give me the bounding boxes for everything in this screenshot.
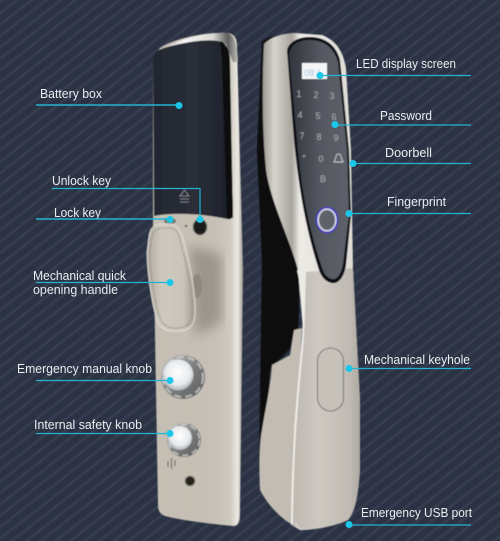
callout: password: Password	[380, 109, 432, 123]
LED display screen: 08:1	[304, 68, 322, 78]
callout: emergency USB port: Emergency USB port	[361, 506, 472, 520]
battery box cover	[153, 40, 233, 219]
callout: fingerprint	[346, 195, 471, 217]
callout: lock key: Lock key	[54, 206, 102, 220]
callout: emergency USB port	[346, 506, 472, 528]
keypad digits: 9	[333, 133, 339, 143]
indicator dot	[185, 225, 187, 227]
emergency manual knob	[161, 355, 205, 399]
keypad digits: 6	[331, 112, 337, 122]
body left edge highlight	[292, 270, 304, 525]
plate: interior metal backplate	[153, 33, 243, 526]
callout: mechanical quick opening handle	[33, 269, 174, 297]
speaker icon	[168, 458, 175, 469]
callout: internal safety knob	[34, 418, 174, 437]
fingerprint sensor	[316, 208, 338, 232]
eject icon	[180, 190, 189, 202]
interior lock unit	[147, 33, 243, 526]
callout: doorbell	[350, 146, 471, 167]
keypad digits: 3	[329, 91, 335, 101]
LED display screen	[302, 63, 327, 79]
callout: LED display screen: LED display screen	[356, 57, 456, 71]
callout: doorbell: Doorbell	[385, 146, 432, 160]
callout: battery box: Battery box	[40, 87, 103, 101]
handle pivot	[192, 274, 202, 298]
callout: mechanical keyhole: Mechanical keyhole	[364, 353, 470, 367]
callout: unlock key	[52, 174, 204, 223]
keypad digits: 4	[297, 110, 303, 120]
rear handle silver	[259, 328, 302, 525]
keypad digits: 2	[313, 90, 319, 100]
keypad digits	[296, 89, 339, 184]
keypad digits: 8	[316, 132, 322, 142]
keypad digits: B	[320, 174, 326, 184]
exterior lock unit	[257, 33, 360, 530]
battery cover side strip	[220, 41, 233, 218]
mechanical keyhole cover	[318, 348, 344, 411]
handle shadow on plate	[190, 245, 222, 336]
keypad digits: *	[302, 153, 306, 163]
main body front lower	[292, 268, 360, 529]
handle inner contour	[150, 228, 192, 328]
dark rear edge	[257, 36, 300, 490]
callout: mechanical keyhole	[346, 353, 471, 372]
front panel black glass	[287, 37, 351, 283]
callout: emergency manual knob: Emergency manual knob	[17, 362, 152, 376]
callout: mechanical quick opening handle: opening handle	[33, 283, 118, 297]
callout: fingerprint: Fingerprint	[387, 195, 447, 209]
top chrome cap	[155, 33, 238, 62]
callout: lock key	[36, 206, 174, 223]
callout: emergency manual knob	[17, 362, 174, 384]
callout: battery box	[36, 87, 182, 109]
panel glass surface	[289, 40, 349, 279]
main silver edge band	[263, 33, 360, 530]
keypad digits: 5	[315, 111, 321, 121]
bottom hole	[185, 476, 195, 486]
keypad digits: 1	[296, 89, 302, 99]
callout: LED display screen	[316, 57, 471, 79]
callout: internal safety knob: Internal safety knob	[34, 418, 142, 432]
mechanical quick opening handle	[147, 224, 195, 331]
callout: mechanical quick opening handle: Mechanical quick	[33, 269, 127, 283]
keypad digits: 0	[318, 154, 324, 164]
unlock key button	[193, 219, 207, 235]
callout: unlock key: Unlock key	[52, 174, 112, 188]
internal safety knob	[167, 423, 201, 457]
doorbell glyph on keypad	[334, 154, 343, 162]
lock key button	[164, 218, 176, 224]
keypad digits: 7	[299, 131, 305, 141]
callout: password	[332, 109, 471, 128]
